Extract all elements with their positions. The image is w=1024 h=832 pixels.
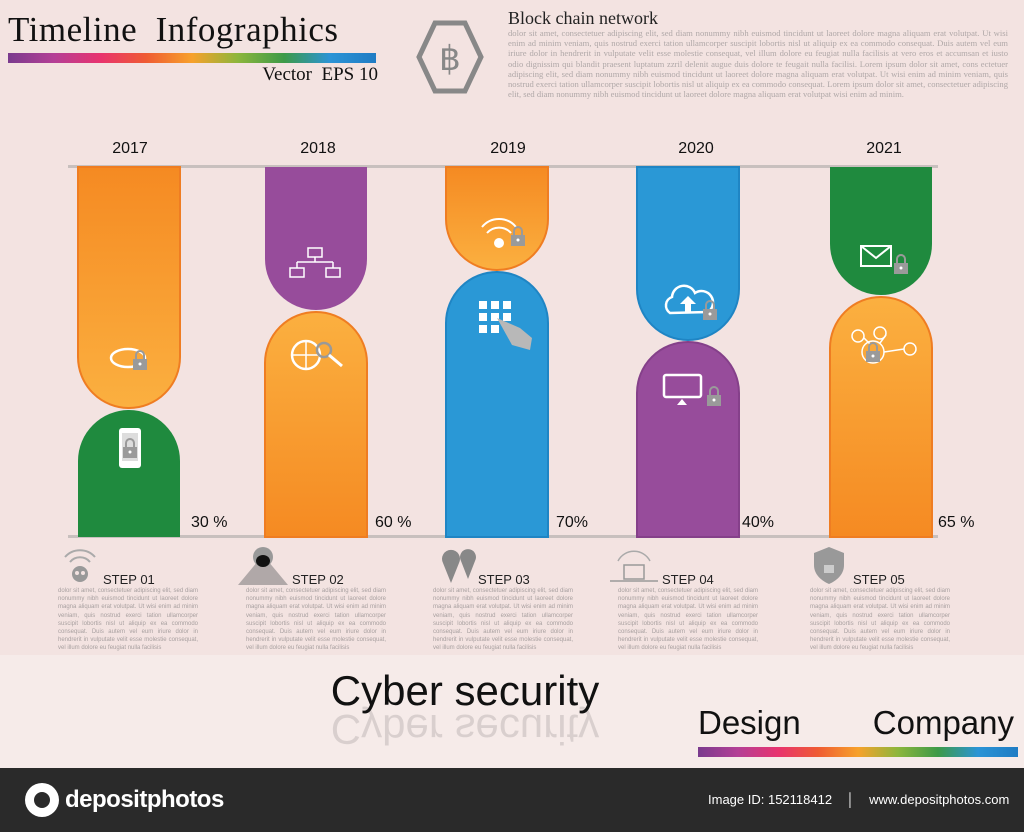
footer logo: depositphotos (65, 786, 224, 813)
years: 2019 (490, 140, 526, 157)
years: 2018 (300, 140, 336, 157)
years: 2020 (678, 140, 714, 157)
heading: cyber security with reflection: Cyber security (331, 667, 599, 714)
footer logo (25, 783, 224, 817)
step 01: dolor sit amet, consectetuer adipiscing elit, sed diam nonummy nibh euismod tincidunt ut laoreet dolore magna aliquam erat volutpat. Ut wisi enim ad minim veniam, quis nostrud exerci tation ullamcorper suscipit lobortis nisl ut aliquip ex ea commodo consequat. Duis autem vel eum iriure dolor in hendrerit in vulputate velit esse molestie consequat, vel illum dolore eu feugiat nulla facilisis (58, 588, 198, 651)
title: Vector EPS 10 (262, 64, 378, 85)
percentages: 70% (556, 514, 588, 531)
step 03: dolor sit amet, consectetuer adipiscing elit, sed diam nonummy nibh euismod tincidunt ut laoreet dolore magna aliquam erat volutpat. Ut wisi enim ad minim veniam, quis nostrud exerci tation ullamcorper suscipit lobortis nisl ut aliquip ex ea commodo consequat. Duis autem vel eum iriure dolor in hendrerit in vulputate velit esse molestie consequat, vel illum dolore eu feugiat nulla facilisis (433, 588, 573, 651)
footer info: Image ID: 152118412 │ www.depositphotos.com (708, 792, 1009, 807)
col 2021 (830, 167, 932, 537)
step 04: dolor sit amet, consectetuer adipiscing elit, sed diam nonummy nibh euismod tincidunt ut laoreet dolore magna aliquam erat volutpat. Ut wisi enim ad minim veniam, quis nostrud exerci tation ullamcorper suscipit lobortis nisl ut aliquip ex ea commodo consequat. Duis autem vel eum iriure dolor in hendrerit in vulputate velit esse molestie consequat, vel illum dolore eu feugiat nulla facilisis (618, 588, 758, 651)
years (112, 140, 902, 157)
percentages: 65 % (938, 514, 974, 531)
heading: cyber security with reflection (331, 667, 600, 753)
col 2018 (265, 167, 367, 537)
title (8, 10, 378, 85)
title: Timeline Infographics (8, 10, 338, 49)
years: 2017 (112, 140, 148, 157)
step 02: dolor sit amet, consectetuer adipiscing elit, sed diam nonummy nibh euismod tincidunt ut laoreet dolore magna aliquam erat volutpat. Ut wisi enim ad minim veniam, quis nostrud exerci tation ullamcorper suscipit lobortis nisl ut aliquip ex ea commodo consequat. Duis autem vel eum iriure dolor in hendrerit in vulputate velit esse molestie consequat, vel illum dolore eu feugiat nulla facilisis (246, 588, 386, 651)
step 01: STEP 01 (103, 572, 155, 587)
step 03: STEP 03 (478, 572, 530, 587)
lines (68, 165, 938, 168)
icon: bitcoin hexagon (416, 20, 484, 94)
header text block: dolor sit amet, consectetuer adipiscing elit, sed diam nonummy nibh euismod tincidunt ut laoreet dolore magna aliquam erat volutpat. Ut wisi enim ad minim veniam, quis nostrud exerci tation ullamcorper suscipit lobortis nisl ut aliquip ex ea commodo consequat. Duis autem vel eum iriure dolor in hendrerit in vulputate velit esse molestie consequat, vel illum dolore eu feugiat nulla facilisis at vero eros et accumsan et iusto odio dignissim qui blandit praesent luptatum zzril delenit augue duis dolore te feugait nulla facilisi. Lorem ipsum dolor sit amet, cons ectetuer adipiscing elit, sed diam nonummy nibh euismod tincidunt ut laoreet dolore magna aliquam erat volutpat. Ut wisi enim ad minim veniam, quis nostrud exerci tation ullamcorper suscipit lobortis nisl ut aliquip ex ea commodo consequat. Lorem ipsum dolor sit amet, consectetuer adipiscing elit, sed diam nonummy nibh euismod tincidunt ut laoreet dolore magna aliquam erat volutpat wisi enim ad minim. (508, 28, 1008, 99)
brand: design company: Design (698, 704, 801, 741)
step 04: STEP 04 (662, 572, 714, 587)
step 01 (58, 549, 198, 651)
brand: design company: Company (873, 704, 1014, 741)
col 2019 (446, 167, 548, 537)
percentages: 60 % (375, 514, 411, 531)
step 04 (610, 550, 758, 651)
brand: design company (698, 704, 1018, 757)
years: 2021 (866, 140, 902, 157)
step 02 (238, 547, 386, 651)
step 05: dolor sit amet, consectetuer adipiscing elit, sed diam nonummy nibh euismod tincidunt ut laoreet dolore magna aliquam erat volutpat. Ut wisi enim ad minim veniam, quis nostrud exerci tation ullamcorper suscipit lobortis nisl ut aliquip ex ea commodo consequat. Duis autem vel eum iriure dolor in hendrerit in vulputate velit esse molestie consequat, vel illum dolore eu feugiat nulla facilisis (810, 588, 950, 651)
heading: cyber security with reflection: Cyber security (331, 706, 599, 753)
footer bar (0, 768, 1024, 832)
col 2020 (637, 167, 739, 537)
title gradient bar (8, 53, 376, 63)
header text block: Block chain network (508, 8, 658, 28)
percentages: 40% (742, 514, 774, 531)
step 03 (433, 549, 573, 651)
percentages (191, 514, 974, 531)
step 02: STEP 02 (292, 572, 344, 587)
step 05 (810, 547, 950, 651)
percentages: 30 % (191, 514, 227, 531)
timeline chart (68, 140, 974, 538)
step 05: STEP 05 (853, 572, 905, 587)
lower background band (0, 655, 1024, 768)
col 2017 (78, 167, 180, 537)
icon: bitcoin hexagon: ฿ (439, 41, 461, 78)
